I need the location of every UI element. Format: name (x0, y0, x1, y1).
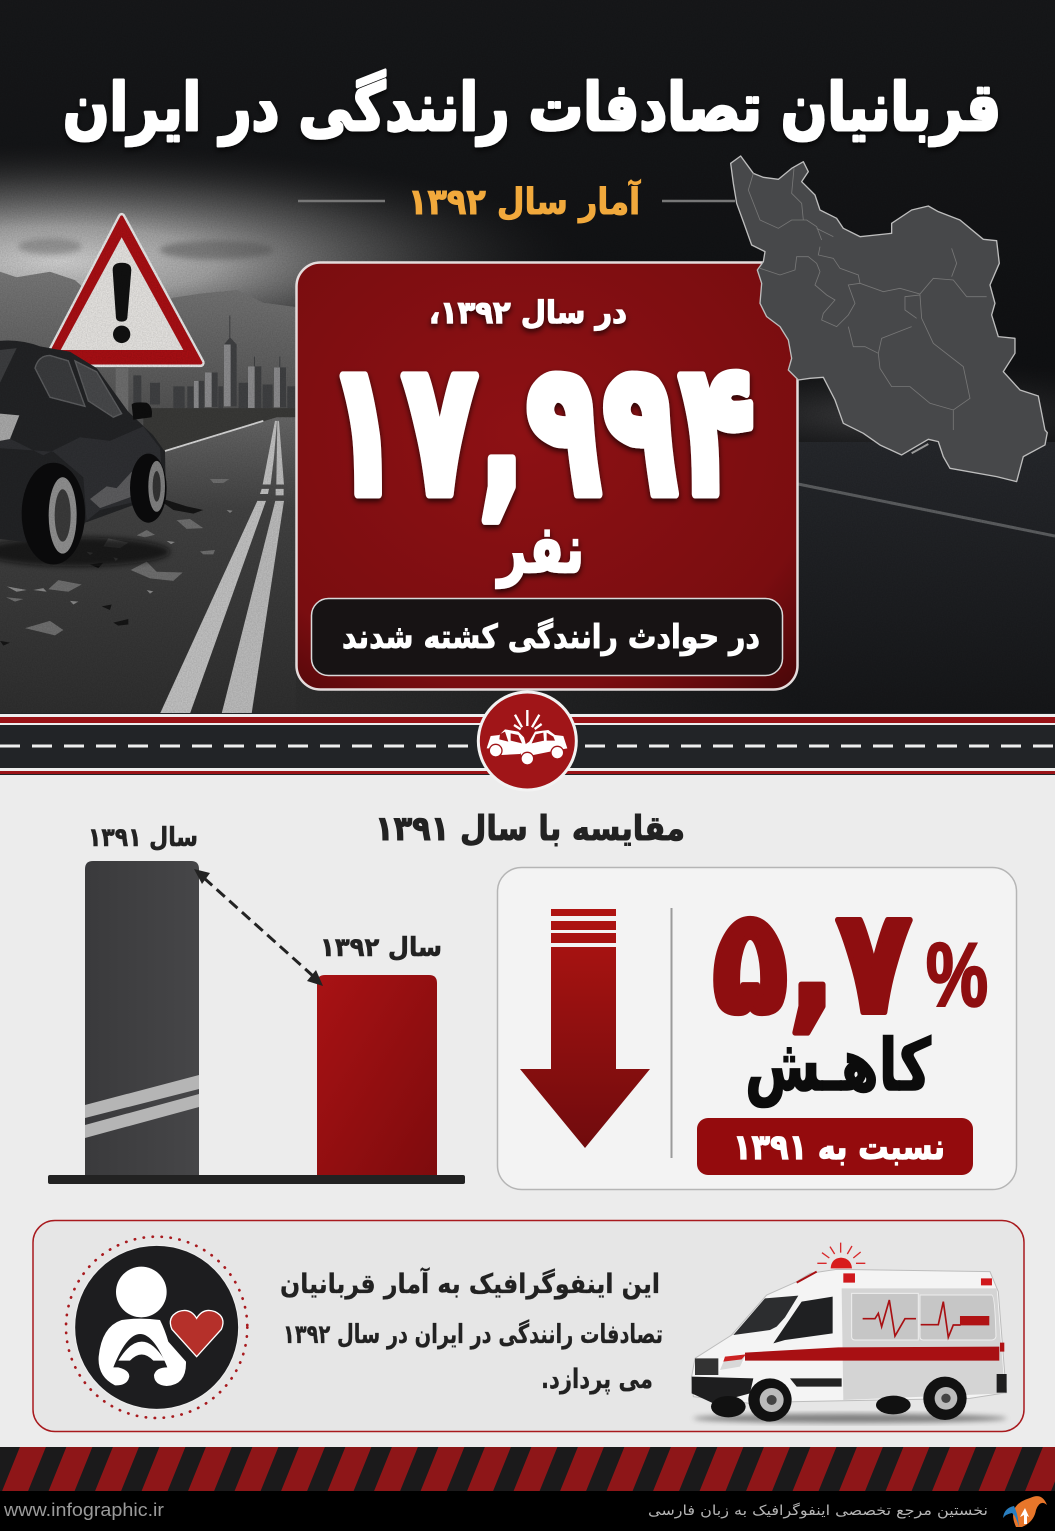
subtitle: آمار سال ۱۳۹۲ (408, 179, 641, 223)
footer bar (0, 1491, 1055, 1531)
lane lines (160, 421, 277, 714)
label: 1391: سال ۱۳۹۱ (88, 823, 198, 853)
number: 17,994: ۱۷,۹۹۴ (325, 321, 755, 538)
pill: killed in traffic accidents: در حوادث رانندگی کشته شدند (342, 617, 760, 657)
panel: decrease (498, 868, 1016, 1190)
icon: down arrow (520, 909, 650, 1148)
text: description (280, 1267, 663, 1395)
number: 5.7: ۵,۷ (712, 878, 912, 1047)
road divider band (0, 713, 1055, 775)
logo (1003, 1496, 1047, 1527)
illustration: damaged car (0, 341, 170, 566)
text: people: نفر (496, 511, 584, 588)
bar: 1391 (85, 861, 199, 1175)
texture: grain overlay (0, 0, 1055, 714)
heading: comparison with 1391: مقایسه با سال ۱۳۹۱ (375, 809, 685, 849)
bar: 1392 (317, 975, 437, 1175)
text: description: تصادفات رانندگی در ایران در سال ۱۳۹۲ (283, 1319, 663, 1350)
website url: www.infographic.ir (3, 1500, 164, 1520)
map: Iran provinces (731, 156, 1047, 482)
divider (670, 908, 672, 1158)
pill: relative to 1391 (697, 1118, 973, 1175)
label: 1392: سال ۱۳۹۲ (320, 933, 442, 963)
tagline: نخستین مرجع تخصصی اینفوگرافیک به زبان فارسی (648, 1502, 988, 1519)
hazard stripe band (0, 1447, 1055, 1491)
bar chart: 1391 vs 1392 (48, 823, 465, 1184)
text: in the year 1392: در سال ۱۳۹۲، (429, 295, 627, 331)
illustration: ambulance (692, 1243, 1007, 1423)
pill: relative to 1391: نسبت به ۱۳۹۱ (733, 1128, 945, 1168)
percent sign: % (926, 926, 988, 1026)
icon: car crash badge (478, 692, 576, 790)
text: description: این اینفوگرافیک به آمار قربانیان (280, 1267, 660, 1300)
panel: lower light background (0, 774, 1055, 1447)
arrow: dashed comparison (194, 869, 323, 986)
pill: killed in traffic accidents (312, 598, 782, 676)
debris (6, 479, 229, 635)
left landscape scene (0, 238, 297, 720)
icon: driver and heart (66, 1237, 247, 1418)
text: description: می پردازد. (541, 1364, 653, 1395)
panel: main statistic card (296, 262, 798, 690)
panel: description (33, 1220, 1024, 1432)
icon: warning road sign (46, 217, 201, 412)
text: decrease: کاهـش (745, 1023, 931, 1107)
right road surface (798, 442, 1055, 714)
chart baseline (48, 1175, 465, 1184)
panel: hero road scene (0, 0, 1055, 720)
